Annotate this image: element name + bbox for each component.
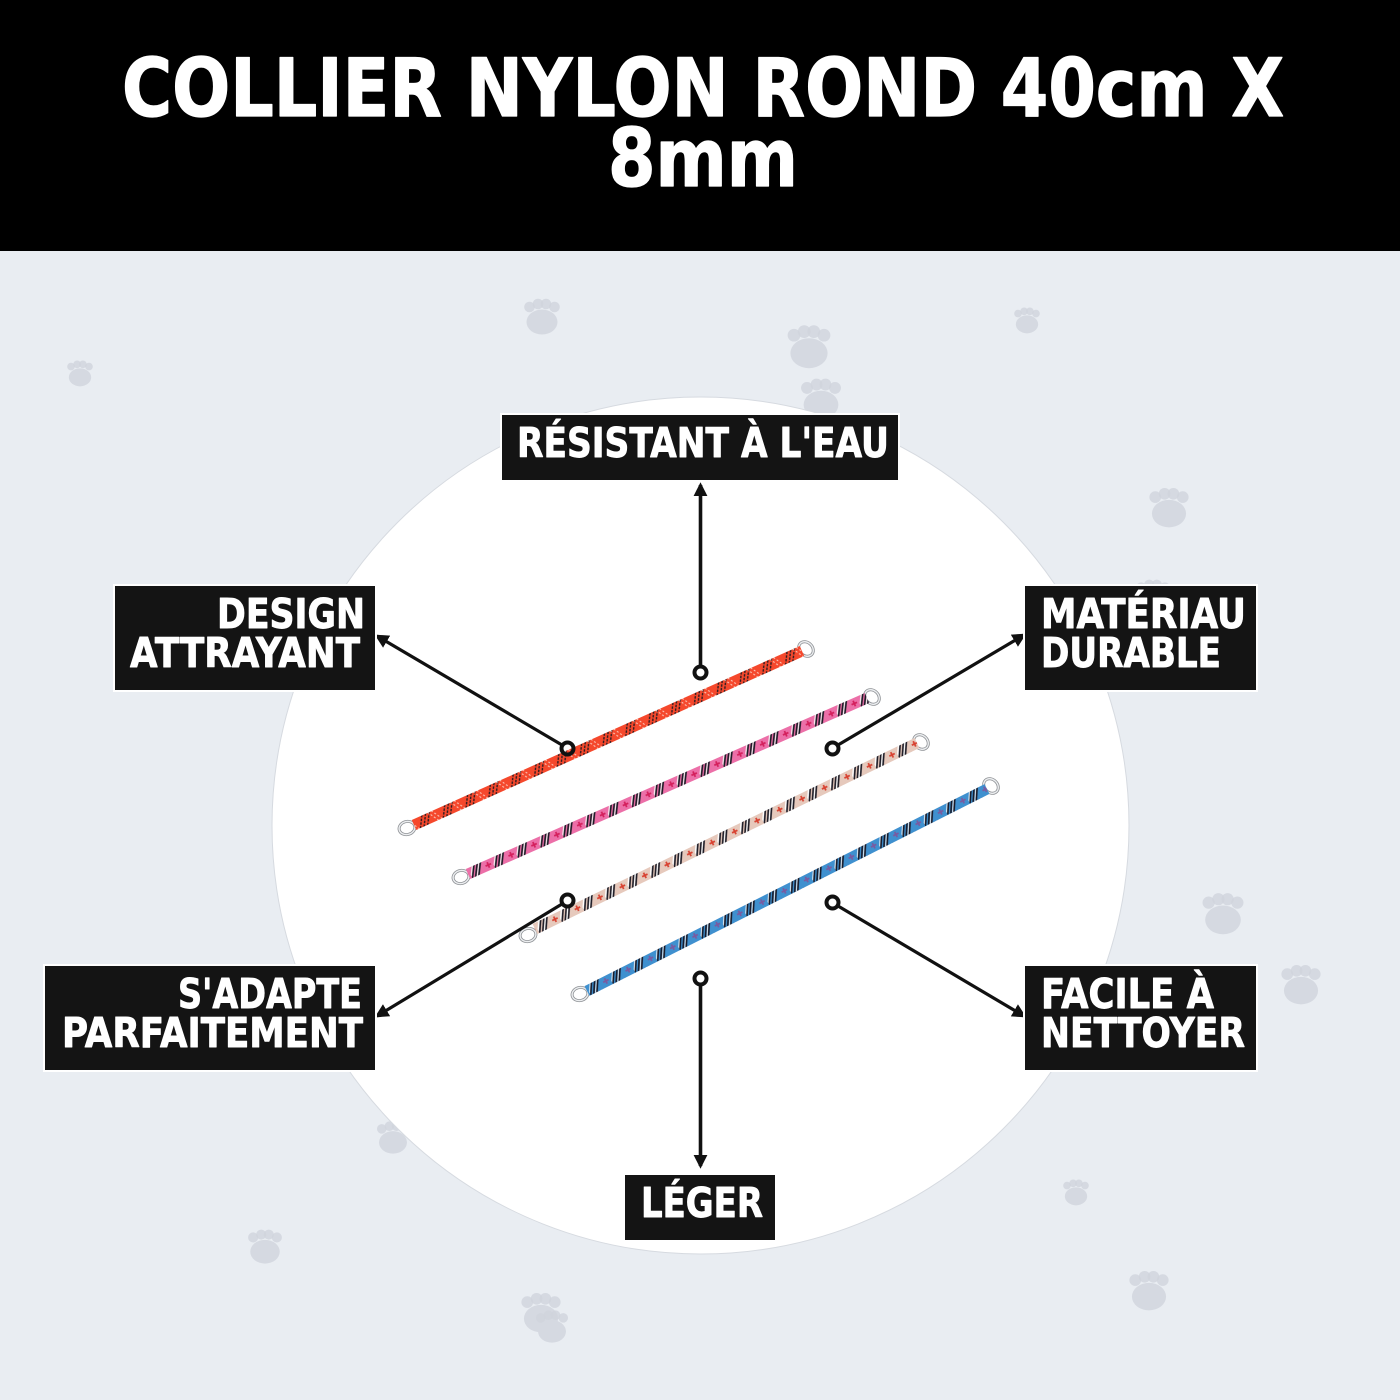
white circle panel <box>272 397 1129 1254</box>
header band <box>0 0 1400 251</box>
label: s'adapte parfaitement: PARFAITEMENT <box>62 1009 363 1057</box>
collars <box>398 639 1001 1002</box>
label: facile à nettoyer: NETTOYER <box>1041 1009 1245 1057</box>
arrow: light <box>694 972 706 1166</box>
label: design attrayant <box>114 585 376 691</box>
title line 2: 8mm <box>608 112 798 205</box>
collar: pink <box>452 687 882 885</box>
label: facile à nettoyer: FACILE À <box>1041 970 1214 1018</box>
label: design attrayant: DESIGN <box>217 590 365 638</box>
label: léger: LÉGER <box>641 1179 763 1227</box>
arrow: attractive design <box>377 636 574 754</box>
label: facile à nettoyer <box>1024 965 1257 1071</box>
arrow: easy clean <box>826 896 1024 1016</box>
label: léger <box>624 1174 776 1241</box>
label: s'adapte parfaitement: S'ADAPTE <box>178 970 362 1018</box>
arrow: perfect fit <box>377 894 574 1016</box>
collar: beige <box>519 732 931 943</box>
label: matériau durable: MATÉRIAU <box>1041 590 1246 638</box>
arrow: durable material <box>826 635 1024 754</box>
label: résistant à l'eau: RÉSISTANT À L'EAU <box>517 419 889 467</box>
label: matériau durable <box>1024 585 1257 691</box>
label: s'adapte parfaitement <box>44 965 376 1071</box>
background paw prints <box>67 299 1321 1343</box>
collar: red <box>398 639 816 836</box>
label: matériau durable: DURABLE <box>1041 629 1221 677</box>
arrow: water resistant <box>694 485 706 678</box>
label: design attrayant: ATTRAYANT <box>130 629 360 677</box>
collar: blue <box>571 776 1001 1002</box>
label: résistant à l'eau <box>501 414 899 481</box>
